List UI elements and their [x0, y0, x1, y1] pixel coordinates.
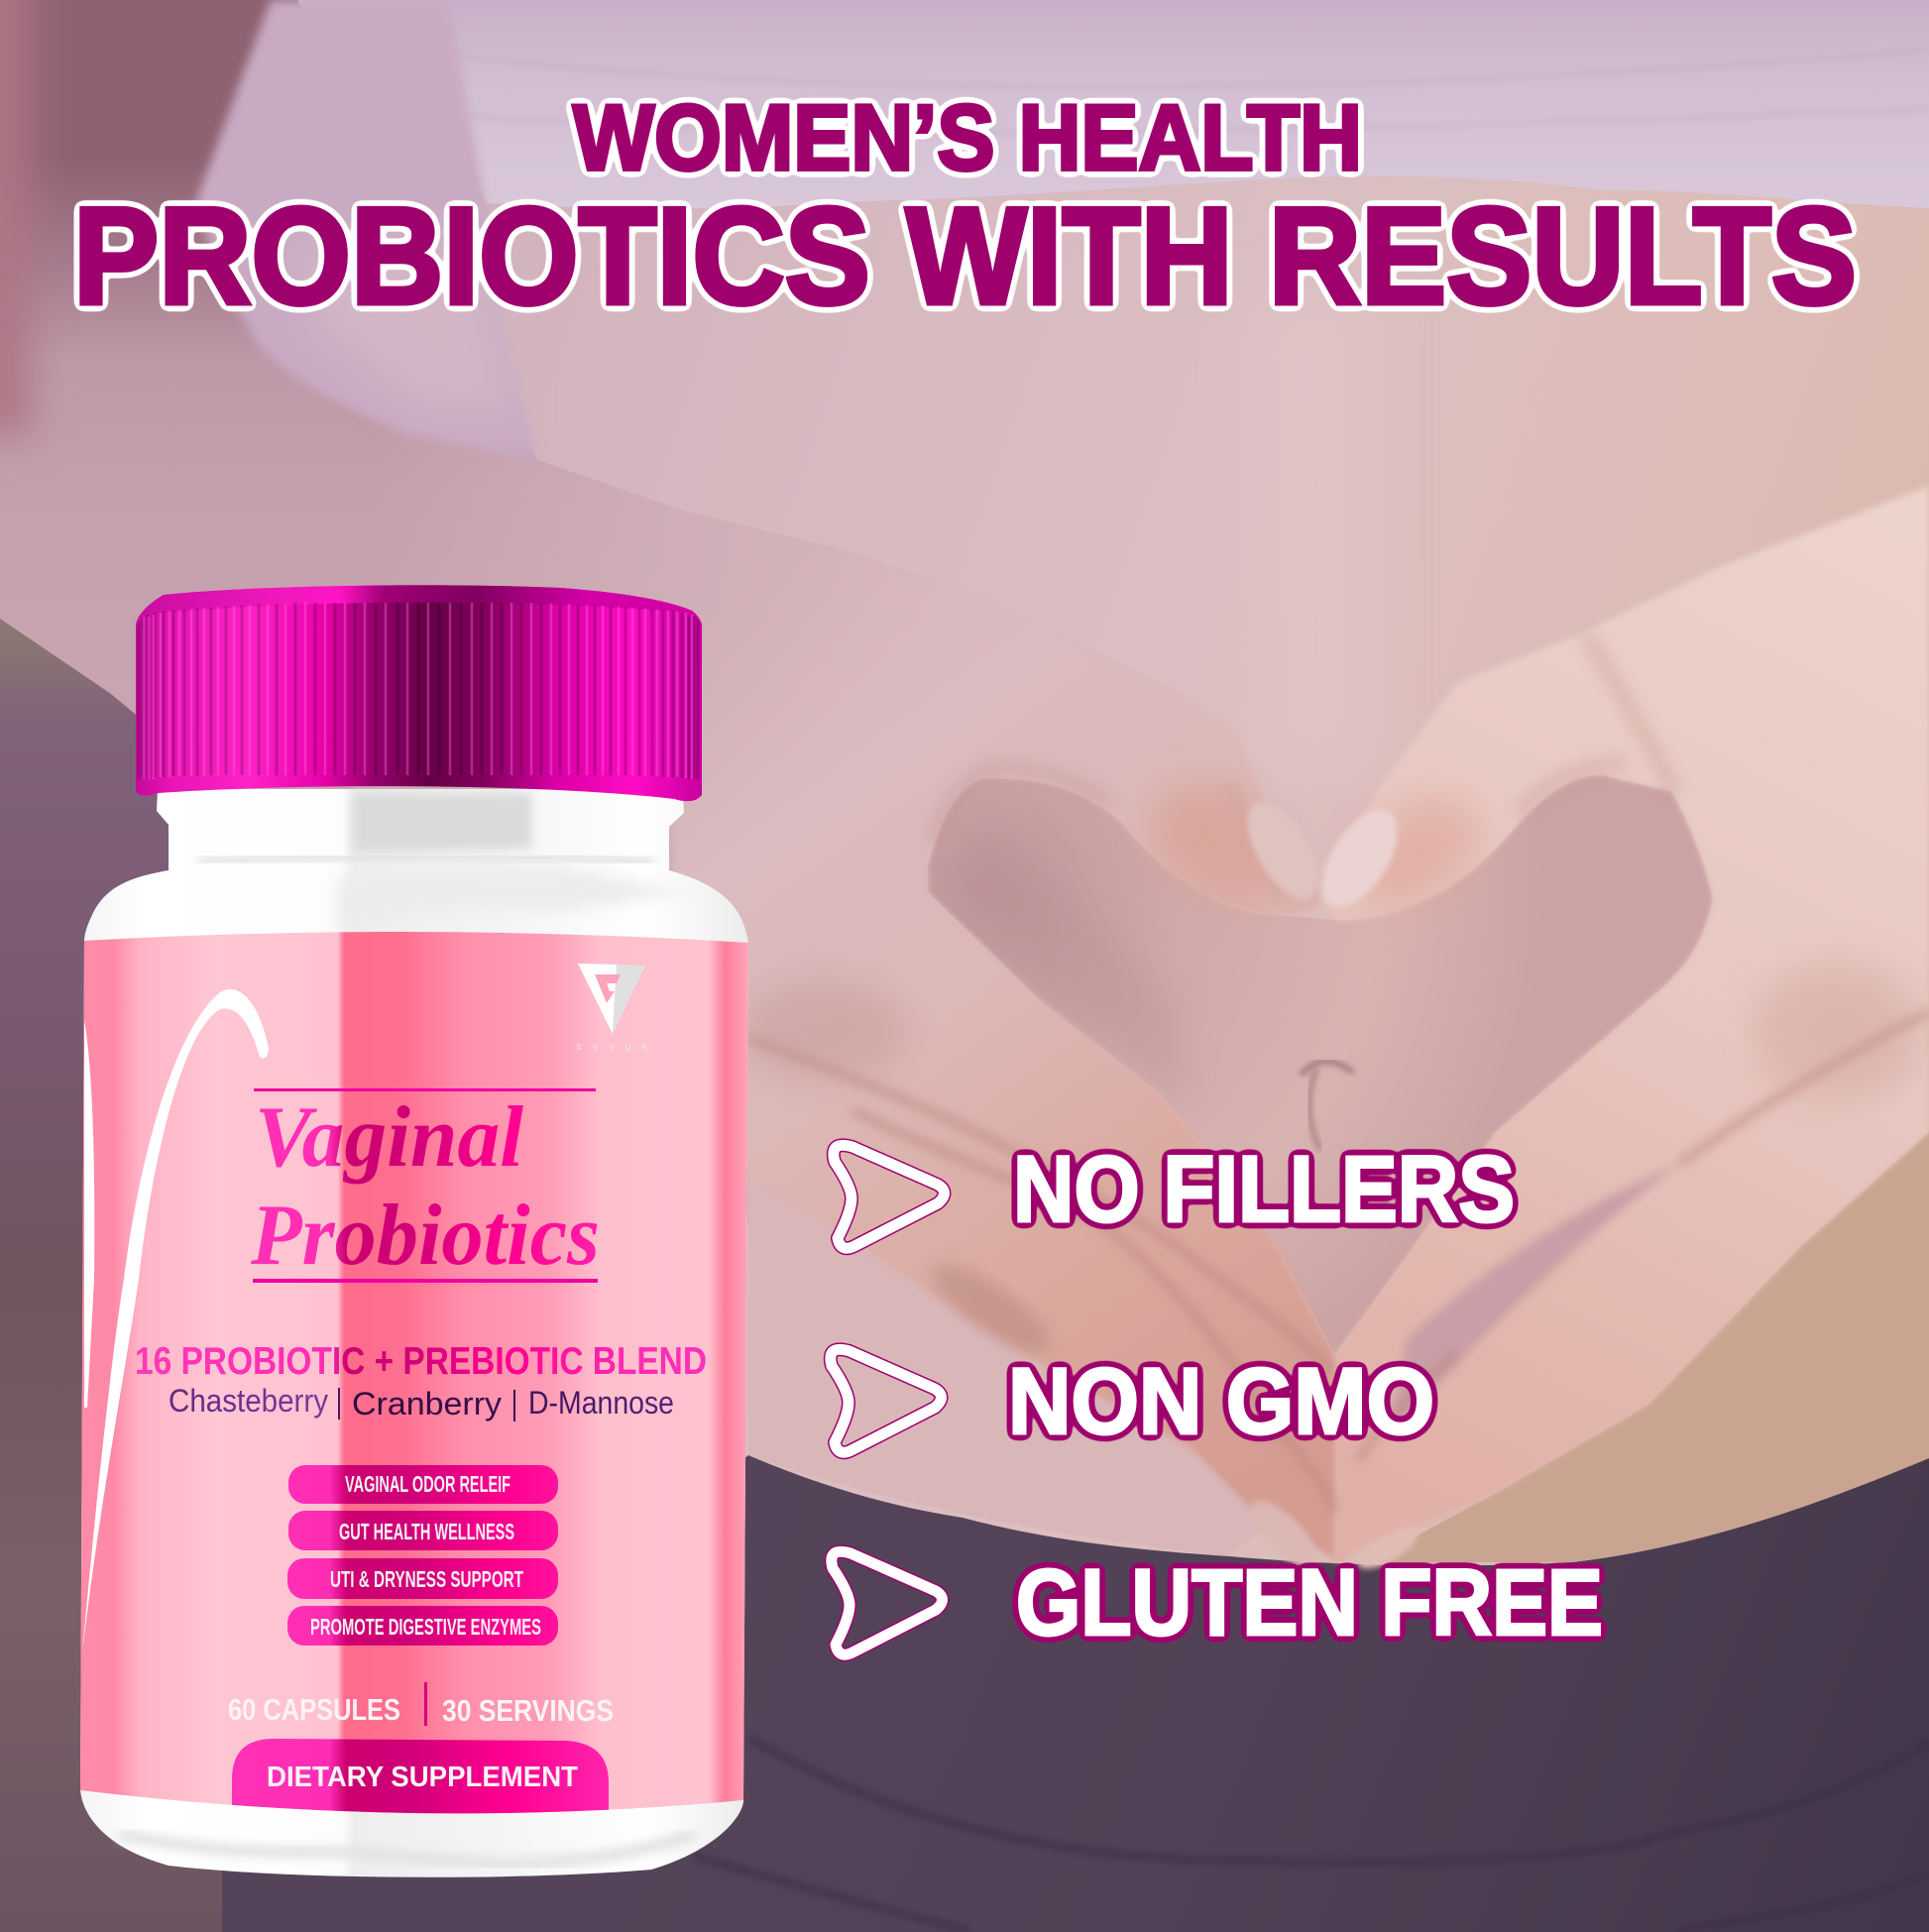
dietary supplement badge: [232, 1739, 609, 1814]
sleeve cuff: [197, 0, 537, 460]
benefit pills: VAGINAL ODOR RELEIF: [345, 1471, 511, 1497]
left hand: [674, 535, 1343, 1562]
finger creases and shading: [748, 1012, 1929, 1512]
benefit pills: GUT HEALTH WELLNESS: [339, 1519, 514, 1544]
product name: Probiotics: [250, 1188, 600, 1284]
feature: gluten free: GLUTEN FREE: [1016, 1550, 1603, 1655]
bottle cap: [136, 585, 702, 801]
capsule and serving counts: 30 SERVINGS: [442, 1693, 614, 1728]
benefit pills: PROMOTE DIGESTIVE ENZYMES: [310, 1614, 541, 1640]
product name: [250, 1088, 600, 1284]
icon: triangle arrow: [831, 1349, 942, 1452]
feature: no fillers: NO FILLERS: [1013, 1137, 1515, 1242]
shirt: [436, 0, 1929, 208]
gap between right fingers: [1388, 1164, 1679, 1437]
bottle label: [80, 932, 748, 1824]
heart opening: [928, 775, 1713, 1354]
brand logo: [577, 964, 647, 1053]
title: [73, 85, 1857, 333]
title line 1: WOMEN’S HEALTH: [573, 85, 1362, 189]
capsule and serving counts: [228, 1682, 614, 1728]
shorts: [222, 1455, 1929, 1932]
bottle body: [80, 789, 748, 1877]
nails: [1233, 790, 1332, 911]
feature: gluten free: [832, 1550, 1603, 1655]
icon: triangle arrow: [832, 1551, 942, 1654]
dietary supplement badge: DIETARY SUPPLEMENT: [267, 1762, 578, 1793]
benefit pills: UTI & DRYNESS SUPPORT: [330, 1566, 523, 1592]
ingredients line: Cranberry: [352, 1386, 502, 1421]
white swoosh: [82, 989, 269, 1653]
product bottle: [80, 585, 748, 1877]
feature list: [831, 1137, 1603, 1655]
blend headline: 16 PROBIOTIC + PREBIOTIC BLEND: [135, 1340, 707, 1383]
navel: [1301, 1062, 1353, 1076]
brand logo: FYYUS: [577, 1043, 647, 1053]
lower belly: [748, 1177, 1267, 1556]
right hand: [1320, 486, 1929, 1562]
product name: Vaginal: [255, 1089, 524, 1186]
feature: non gmo: NON GMO: [1008, 1349, 1434, 1454]
feature: non gmo: [831, 1349, 1434, 1454]
ingredients line: [169, 1383, 674, 1421]
feature: no fillers: [834, 1137, 1515, 1248]
ingredients line: D-Mannose: [528, 1385, 674, 1421]
ingredients line: Chasteberry: [169, 1383, 328, 1419]
forearm and upper left backdrop: [0, 0, 1229, 1229]
icon: triangle arrow: [834, 1145, 944, 1248]
backdrop left of the bottle: [0, 595, 238, 1932]
capsule and serving counts: 60 CAPSULES: [228, 1692, 400, 1727]
benefit pills: [287, 1465, 558, 1646]
